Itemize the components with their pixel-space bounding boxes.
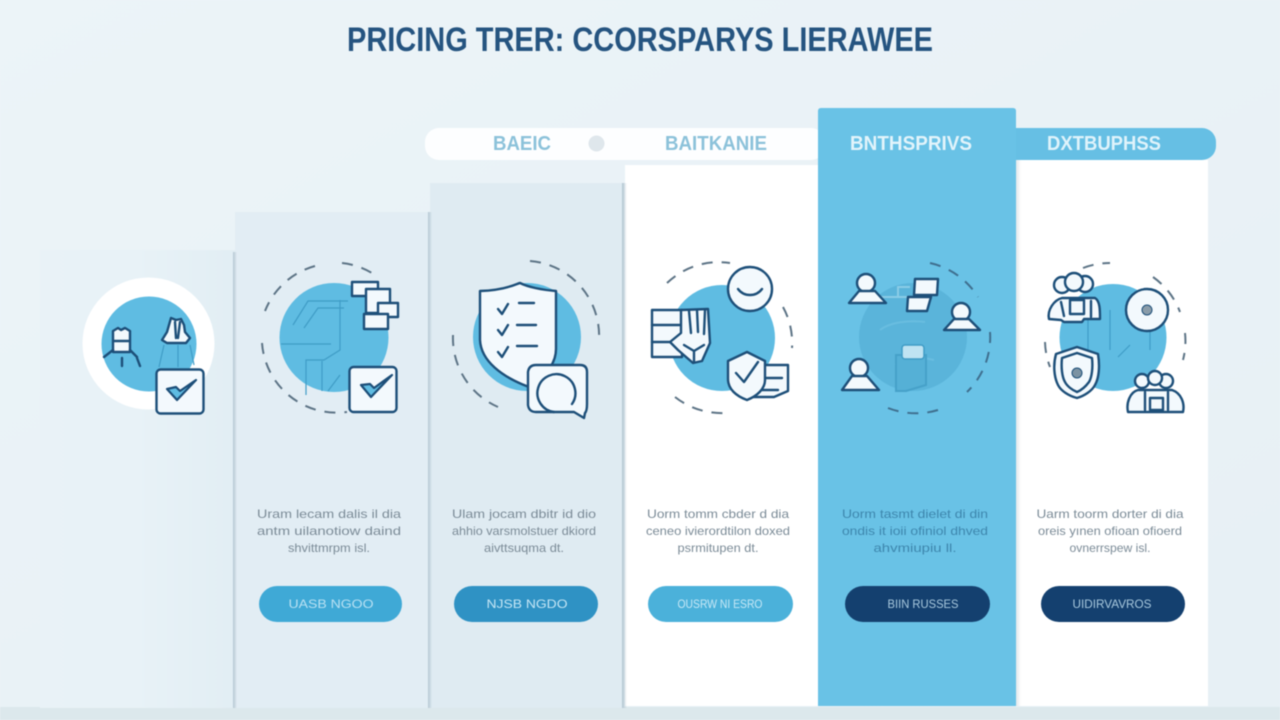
tab label: standard: BAITKANIE <box>665 133 767 155</box>
icon: groups, target and shield <box>1045 263 1185 412</box>
button: UIDIRVAVROS <box>1072 597 1152 611</box>
text block <box>452 507 596 555</box>
text block: Uarm toorm dorter di dia <box>1036 507 1184 521</box>
tab dot <box>588 136 604 152</box>
text block: ahhio varsmolstuer dkiord <box>452 524 596 538</box>
button: UASB NGOO <box>288 597 374 611</box>
icon: checklist shield with chat bubble <box>453 261 599 418</box>
text block <box>257 507 401 555</box>
text block: psrmitupen dt. <box>678 541 758 555</box>
text block: ahvmiupiu ll. <box>874 541 956 555</box>
icon: connected people <box>842 263 990 413</box>
panel: column 1 <box>233 212 430 708</box>
text block: Ulam jocam dbitr id dio <box>452 507 596 521</box>
text block: Uram lecam dalis il dia <box>257 507 401 521</box>
pill: plan tab right <box>1000 128 1216 160</box>
icon: team check badge <box>82 278 214 414</box>
text block <box>1036 507 1184 555</box>
button: OUSRW NI ESRO <box>678 597 762 611</box>
button <box>845 586 990 622</box>
title: PRICING TRER: CCORSPARYS LIERAWEE <box>347 21 933 59</box>
button: NJSB NGDO <box>486 597 568 611</box>
panel: column 5 <box>1016 160 1208 706</box>
text block: ondis it ioii ofiniol dhved <box>842 524 988 538</box>
text block: oreis yınen ofioan ofioerd <box>1038 524 1182 538</box>
button <box>259 586 402 622</box>
tab label: enterprise: BNTHSPRIVS <box>850 133 972 155</box>
button: BIIN RUSSES <box>888 597 958 611</box>
panel: column 3 <box>622 165 818 708</box>
pill: plan tab right: DXTBUPHSS <box>1047 133 1161 155</box>
button <box>648 586 793 622</box>
text block <box>646 507 790 555</box>
text block: shvittmrpm isl. <box>288 541 370 555</box>
button <box>1041 586 1185 622</box>
bottom floor strip <box>0 707 1280 720</box>
panel: column 0 <box>40 250 235 708</box>
text block: antm uilanotiow daind <box>257 524 401 538</box>
text block: Uorm tomm cbder d dia <box>647 507 789 521</box>
text block: ovnerrspew isl. <box>1070 541 1150 555</box>
tab label: basic: BAEIC <box>493 133 551 155</box>
text block: aivttsuqma dt. <box>484 541 564 555</box>
icon: hand, face and shield <box>652 262 792 413</box>
text block: ceneo ivierordtilon doxed <box>646 524 790 538</box>
text block <box>842 507 988 555</box>
icon: network with check <box>262 263 398 413</box>
panel: column 2 <box>428 183 624 708</box>
pill: plan tabs left <box>425 128 825 160</box>
button <box>454 586 598 622</box>
text block: Uorm tasmt dielet di din <box>842 507 988 521</box>
panel: column 4 highlighted <box>818 108 1016 706</box>
